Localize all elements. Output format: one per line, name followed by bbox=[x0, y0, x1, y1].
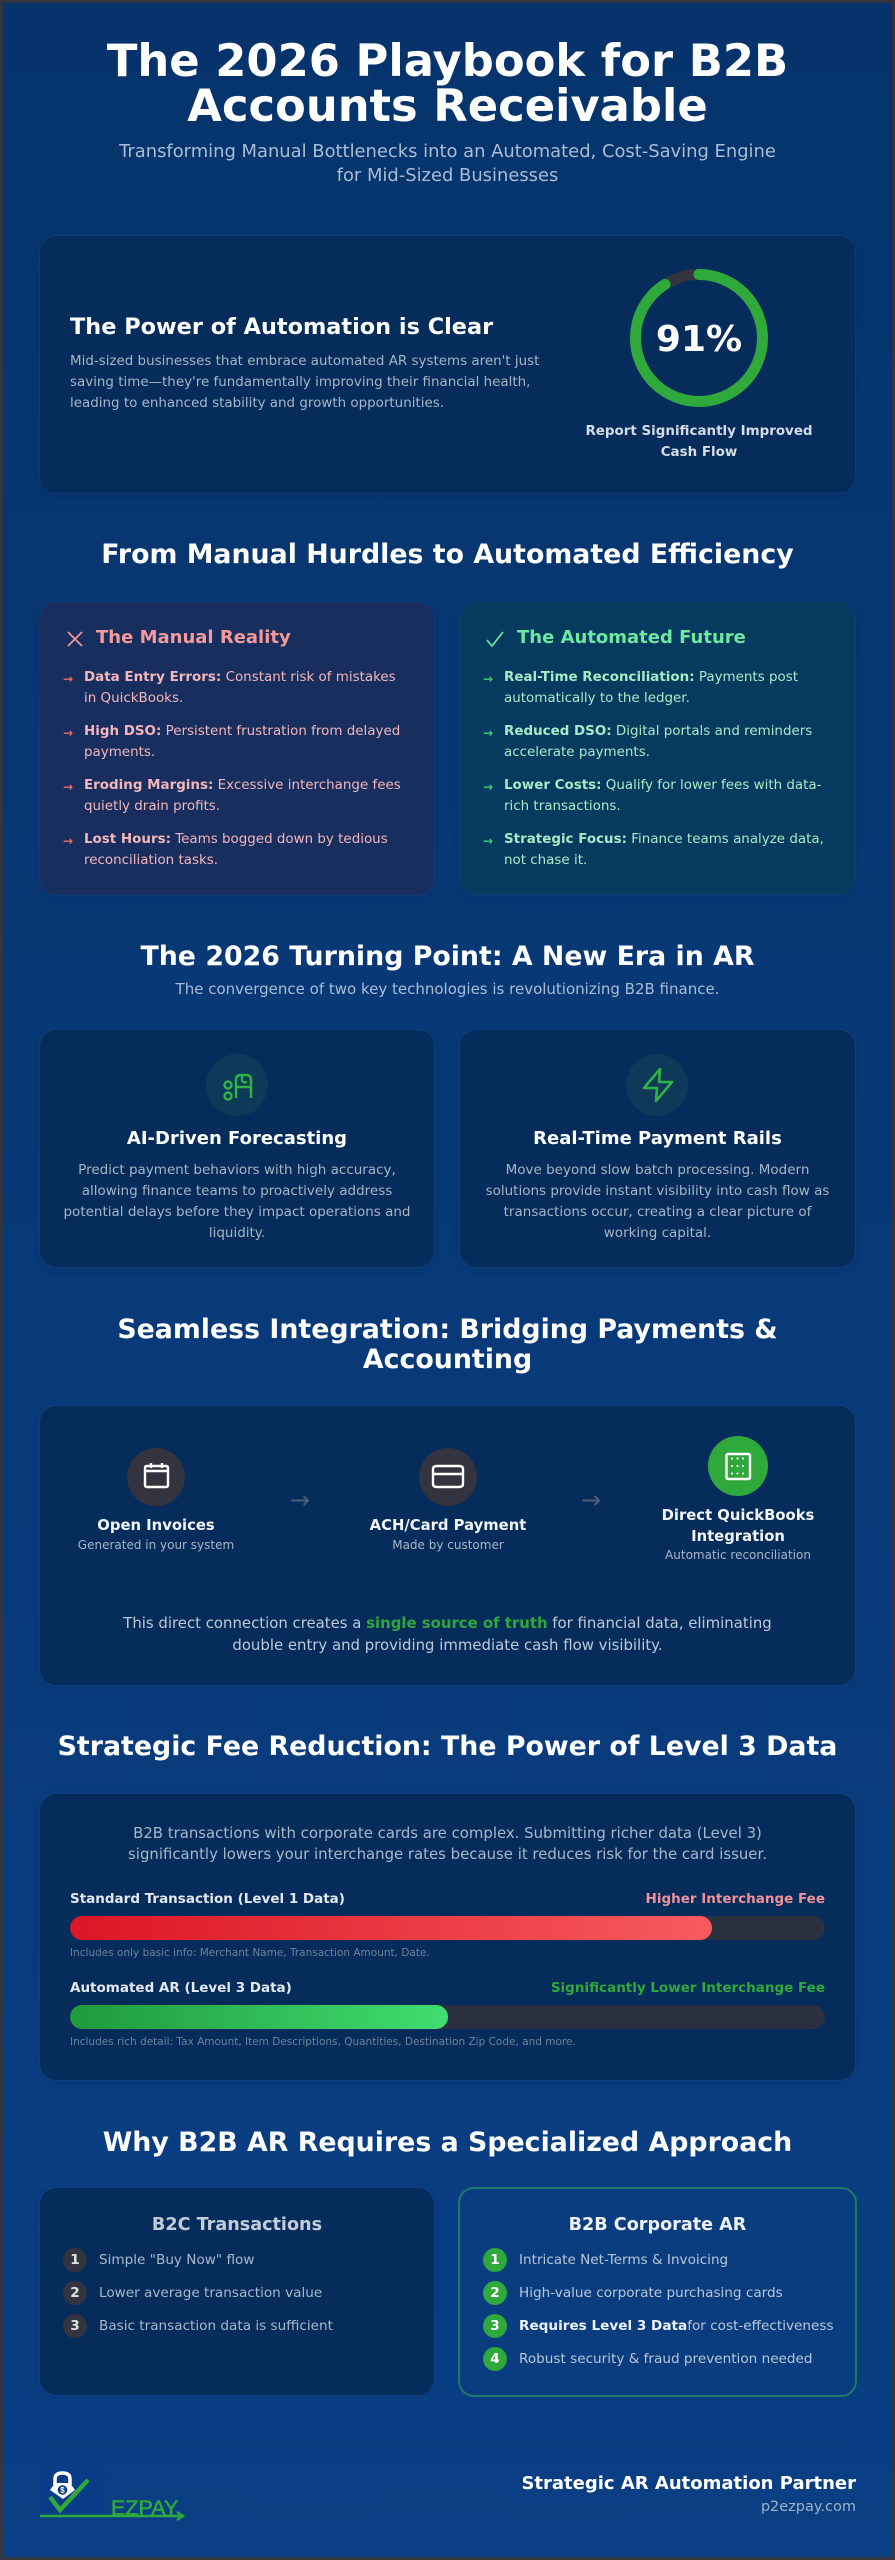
ring label: Report Significantly Improved bbox=[585, 424, 813, 438]
list: manual problems: Eroding Margins: Excessive interchange fees bbox=[84, 778, 401, 792]
arrow bullet: → bbox=[483, 672, 493, 686]
ring label: Cash Flow bbox=[661, 444, 737, 460]
title bbox=[107, 34, 788, 132]
number badge bbox=[63, 2248, 87, 2272]
icon: card bbox=[419, 1448, 477, 1506]
heading: seamless integration bbox=[117, 1314, 778, 1375]
text block: automation description: Mid-sized businesses that embrace automated AR systems aren't just bbox=[70, 354, 539, 368]
list: automated benefits: not chase it. bbox=[504, 852, 587, 868]
chart: level 3 bar bbox=[70, 1980, 825, 2048]
panel: power of automation bbox=[40, 236, 855, 493]
number badge: 1 bbox=[490, 2252, 500, 2268]
bar track bbox=[70, 2005, 825, 2029]
footer url: p2ezpay.com bbox=[761, 2499, 856, 2515]
bar track bbox=[70, 1916, 825, 1940]
list: manual problems: Data Entry Errors: Constant risk of mistakes bbox=[84, 670, 396, 684]
panel: automated future bbox=[460, 602, 855, 895]
panel: B2B corporate AR bbox=[458, 2187, 857, 2397]
number badge bbox=[63, 2314, 87, 2338]
number badge bbox=[483, 2314, 507, 2338]
divider: footer bbox=[40, 2444, 855, 2445]
panel: integration flow bbox=[40, 1406, 855, 1685]
list: manual problems: Lost Hours: Teams bogged down by tedious bbox=[84, 832, 388, 846]
list: manual problems bbox=[63, 670, 401, 868]
icon: AI forecasting bbox=[206, 1054, 268, 1116]
chart: 91 percent ring: 91% bbox=[656, 319, 742, 360]
heading: manual reality: The Manual Reality bbox=[96, 627, 291, 648]
text block: single source of truth: double entry and providing immediate cash flow visibility. bbox=[232, 1636, 663, 1654]
heading: fee reduction: Strategic Fee Reduction: The Power of Level 3 Data bbox=[58, 1731, 837, 1762]
header bbox=[107, 34, 788, 186]
heading: real-time rails: Real-Time Payment Rails bbox=[533, 1128, 782, 1149]
list: B2B items: High-value corporate purchasing cards bbox=[519, 2285, 783, 2301]
text block: real-time rails description: solutions provide instant visibility into cash flow as bbox=[486, 1182, 829, 1198]
list: B2B items bbox=[483, 2248, 834, 2371]
heading: automated future: The Automated Future bbox=[517, 627, 746, 648]
number badge: 3 bbox=[490, 2318, 500, 2334]
list: B2B items: Robust security & fraud prevention needed bbox=[519, 2351, 813, 2367]
arrow bullet: → bbox=[63, 672, 73, 686]
step: ACH card payment bbox=[370, 1448, 526, 1552]
heading: turning point: The 2026 Turning Point: A New Era in AR bbox=[140, 941, 755, 972]
label: ACH/Card Payment bbox=[370, 1517, 526, 1534]
list: B2B items: Intricate Net-Terms & Invoicing bbox=[519, 2252, 728, 2268]
subtitle bbox=[119, 141, 776, 186]
text block: AI forecasting description: potential delays before they impact operations and bbox=[63, 1204, 411, 1220]
sublabel: Generated in your system bbox=[78, 1538, 234, 1552]
panel: B2C transactions bbox=[40, 2188, 434, 2395]
ring label bbox=[585, 424, 813, 460]
chart: level 1 bar bbox=[70, 1891, 825, 1959]
label: Open Invoices bbox=[97, 1517, 215, 1534]
step: QuickBooks integration bbox=[662, 1436, 814, 1562]
subtitle: Transforming Manual Bottlenecks into an Automated, Cost-Saving Engine bbox=[119, 141, 776, 162]
list: automated benefits: Lower Costs: Qualify for lower fees with data- bbox=[504, 778, 822, 792]
text block: level 3 intro: B2B transactions with corporate cards are complex. Submitting richer data (Level 3) bbox=[133, 1824, 762, 1842]
heading: B2B: B2B Corporate AR bbox=[569, 2215, 746, 2235]
number badge bbox=[483, 2347, 507, 2371]
text block: automation description bbox=[70, 354, 540, 410]
text block: AI forecasting description: Predict payment behaviors with high accuracy, bbox=[78, 1162, 396, 1178]
list: automated benefits: Real-Time Reconciliation: Payments post bbox=[504, 670, 798, 684]
icon: lightning bbox=[626, 1054, 688, 1116]
heading: specialized approach: Why B2B AR Requires a Specialized Approach bbox=[103, 2127, 792, 2158]
bar note: Includes rich detail: Tax Amount, Item Descriptions, Quantities, Destination Zip Code, and more. bbox=[70, 2036, 576, 2048]
bar value label: Significantly Lower Interchange Fee bbox=[551, 1980, 825, 1996]
bar label: Automated AR (Level 3 Data) bbox=[70, 1980, 292, 1996]
panel: manual reality bbox=[40, 602, 434, 895]
sublabel: Made by customer bbox=[392, 1538, 504, 1552]
arrow bullet: → bbox=[483, 834, 493, 848]
step: open invoices bbox=[78, 1448, 234, 1552]
list: B2C items: Simple "Buy Now" flow bbox=[99, 2252, 254, 2268]
number badge: 2 bbox=[70, 2285, 80, 2301]
list: automated benefits bbox=[483, 670, 824, 868]
text block: single source of truth: This direct connection creates a single source of truth for financial data, eliminating bbox=[123, 1614, 772, 1632]
text block: real-time rails description: working capital. bbox=[604, 1224, 711, 1240]
heading: seamless integration: Seamless Integration: Bridging Payments & bbox=[117, 1314, 778, 1345]
sublabel: Automatic reconciliation bbox=[665, 1548, 811, 1562]
number badge: 3 bbox=[70, 2318, 80, 2334]
text block: level 3 intro: significantly lowers your interchange rates because it reduces risk for the card issuer. bbox=[128, 1845, 767, 1863]
footer tagline: Strategic AR Automation Partner bbox=[521, 2473, 856, 2494]
icon: check bbox=[486, 632, 504, 648]
arrow bullet: → bbox=[63, 834, 73, 848]
list: manual problems: in QuickBooks. bbox=[84, 690, 183, 706]
list: manual problems: payments. bbox=[84, 744, 155, 760]
chart: 91 percent ring bbox=[630, 269, 768, 407]
title: The 2026 Playbook for B2B bbox=[107, 34, 788, 87]
text block: real-time rails description bbox=[486, 1162, 829, 1240]
arrow: → bbox=[290, 1486, 310, 1514]
list: B2C items bbox=[63, 2248, 333, 2338]
list: automated benefits: Reduced DSO: Digital portals and reminders bbox=[504, 724, 812, 738]
text block: automation description: saving time—they're fundamentally improving their financial health, bbox=[70, 374, 530, 390]
number badge bbox=[483, 2281, 507, 2305]
arrow bullet: → bbox=[483, 780, 493, 794]
label: Direct QuickBooks bbox=[662, 1507, 814, 1524]
label bbox=[662, 1507, 814, 1545]
text block: real-time rails description: transactions occur, creating a clear picture of bbox=[504, 1204, 811, 1220]
list: automated benefits: automatically to the ledger. bbox=[504, 690, 690, 706]
list: B2C items: Lower average transaction value bbox=[99, 2285, 322, 2301]
number badge: 4 bbox=[490, 2351, 500, 2367]
panel: real-time rails bbox=[460, 1030, 855, 1267]
list: manual problems: High DSO: Persistent frustration from delayed bbox=[84, 724, 400, 738]
heading: AI forecasting: AI-Driven Forecasting bbox=[127, 1128, 347, 1149]
text block: AI forecasting description bbox=[63, 1162, 411, 1240]
footer logo: EZPAY bbox=[111, 2496, 178, 2520]
heading: seamless integration: Accounting bbox=[363, 1344, 532, 1375]
arrow bullet: → bbox=[483, 726, 493, 740]
text block: real-time rails description: Move beyond slow batch processing. Modern bbox=[506, 1162, 809, 1178]
text block: automation description: leading to enhanced stability and growth opportunities. bbox=[70, 396, 444, 410]
text block: level 3 intro bbox=[128, 1824, 767, 1863]
heading: power of automation: The Power of Automation is Clear bbox=[70, 314, 493, 340]
title: Accounts Receivable bbox=[187, 79, 708, 132]
list: manual problems: quietly drain profits. bbox=[84, 798, 220, 814]
icon: ledger bbox=[708, 1436, 768, 1496]
footer logo bbox=[40, 2471, 185, 2521]
footer logo: $ bbox=[60, 2486, 65, 2495]
arrow bullet: → bbox=[63, 726, 73, 740]
number badge: 2 bbox=[490, 2285, 500, 2301]
list: B2C items: Basic transaction data is sufficient bbox=[99, 2318, 333, 2334]
panel: level 3 data bbox=[40, 1794, 855, 2080]
subheading: turning point: The convergence of two key technologies is revolutionizing B2B finance. bbox=[176, 980, 719, 998]
bar note: Includes only basic info: Merchant Name, Transaction Amount, Date. bbox=[70, 1947, 430, 1959]
number badge: 1 bbox=[70, 2252, 80, 2268]
list: automated benefits: accelerate payments. bbox=[504, 744, 650, 760]
panel: AI forecasting bbox=[40, 1030, 434, 1267]
icon: calendar bbox=[127, 1448, 185, 1506]
list: automated benefits: rich transactions. bbox=[504, 798, 621, 814]
text block: AI forecasting description: liquidity. bbox=[209, 1224, 265, 1240]
icon: cross bbox=[68, 631, 82, 647]
list: B2B items: Requires Level 3 Datafor cost-effectiveness bbox=[519, 2318, 834, 2334]
text block: single source of truth bbox=[123, 1614, 772, 1654]
heading: B2C: B2C Transactions bbox=[152, 2215, 322, 2235]
arrow: → bbox=[581, 1486, 601, 1514]
subtitle: for Mid-Sized Businesses bbox=[337, 165, 558, 186]
list: automated benefits: Strategic Focus: Finance teams analyze data, bbox=[504, 832, 824, 846]
label: Integration bbox=[691, 1528, 785, 1545]
heading: manual hurdles: From Manual Hurdles to Automated Efficiency bbox=[101, 539, 794, 570]
number badge bbox=[63, 2281, 87, 2305]
bar label: Standard Transaction (Level 1 Data) bbox=[70, 1891, 345, 1907]
arrow bullet: → bbox=[63, 780, 73, 794]
list: manual problems: reconciliation tasks. bbox=[84, 852, 218, 868]
bar value label: Higher Interchange Fee bbox=[646, 1891, 825, 1907]
number badge bbox=[483, 2248, 507, 2272]
text block: AI forecasting description: allowing finance teams to proactively address bbox=[82, 1182, 392, 1198]
